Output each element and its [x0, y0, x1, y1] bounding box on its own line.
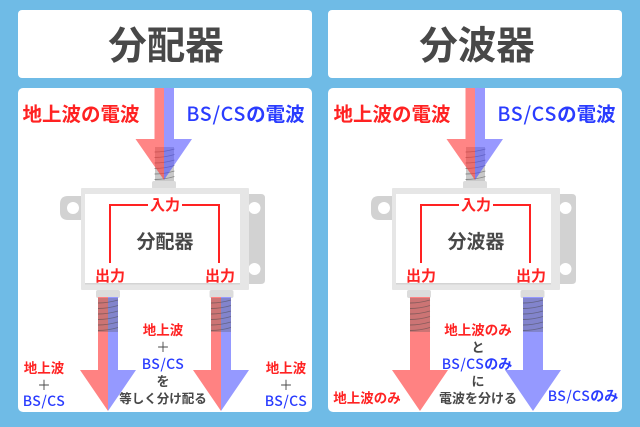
- device name: 分波器: [447, 231, 505, 253]
- label: terrestrial waves: 地上波の電波: [22, 104, 140, 126]
- title: 分波器: 分波器: [419, 25, 535, 68]
- device mounting ears: [60, 194, 265, 284]
- output arrow right: [193, 297, 249, 411]
- label: output left: 出力: [406, 268, 436, 285]
- device body: [81, 188, 249, 290]
- center explanation: を: [156, 374, 170, 389]
- label: BS/CS waves: BS/CSの電波: [186, 98, 305, 127]
- center explanation: BS/CSのみ: [442, 354, 512, 374]
- center explanation: [439, 322, 517, 406]
- mounting holes: [378, 202, 572, 275]
- right output label: [265, 360, 307, 411]
- center explanation: 地上波: [143, 322, 184, 338]
- title: 分配器: 分配器: [108, 25, 224, 68]
- label: output right: 出力: [205, 268, 235, 285]
- output arrow left: [80, 297, 136, 411]
- center explanation: 地上波のみ: [444, 322, 512, 338]
- center explanation: に: [471, 374, 485, 389]
- output connector left: [407, 290, 431, 298]
- output connector right: [520, 290, 544, 298]
- mounting holes: [67, 202, 260, 275]
- input cable connector: [463, 147, 487, 189]
- signal path lines: [110, 205, 219, 263]
- signal path lines: [421, 205, 530, 263]
- label: output right: 出力: [516, 268, 546, 285]
- panel: right title box: [328, 10, 622, 78]
- right output label: 地上波: [266, 360, 307, 376]
- input cable connector: [152, 147, 176, 189]
- right output label: ＋: [279, 378, 293, 393]
- output connector right: [210, 290, 234, 298]
- device body: [392, 188, 560, 290]
- center explanation: 等しく分け配る: [119, 391, 207, 406]
- label: input: 入力: [150, 197, 180, 214]
- panel: left title box: [18, 10, 312, 78]
- panel: right diplexer diagram: [328, 88, 622, 412]
- output arrow: BS/CS only: [505, 297, 561, 411]
- label: terrestrial waves: 地上波の電波: [333, 104, 451, 126]
- center explanation: ＋: [156, 340, 170, 355]
- right output label: BS/CS: [265, 391, 307, 411]
- left output label: BS/CS: [23, 391, 65, 411]
- output connector left: [96, 290, 120, 298]
- label: BS/CS waves: BS/CSの電波: [497, 98, 616, 127]
- panel: left splitter diagram: [18, 88, 312, 412]
- right output label: BS/CSのみ: [548, 386, 618, 406]
- left output label: [23, 360, 65, 411]
- left output label: ＋: [37, 378, 51, 393]
- center explanation: BS/CS: [142, 354, 184, 374]
- label: output left: 出力: [95, 268, 125, 285]
- input arrow: terrestrial and BS/CS: [446, 88, 503, 180]
- device mounting ears: [371, 194, 576, 284]
- center explanation: [119, 322, 207, 406]
- output arrow: terrestrial only: [392, 297, 448, 411]
- label: input: 入力: [461, 197, 491, 214]
- left output label: 地上波: [24, 360, 65, 376]
- left output label: 地上波のみ: [333, 390, 401, 406]
- center explanation: 電波を分ける: [439, 391, 517, 406]
- center explanation: と: [471, 340, 485, 355]
- input arrow: terrestrial and BS/CS: [136, 88, 192, 180]
- device name: 分配器: [136, 231, 194, 253]
